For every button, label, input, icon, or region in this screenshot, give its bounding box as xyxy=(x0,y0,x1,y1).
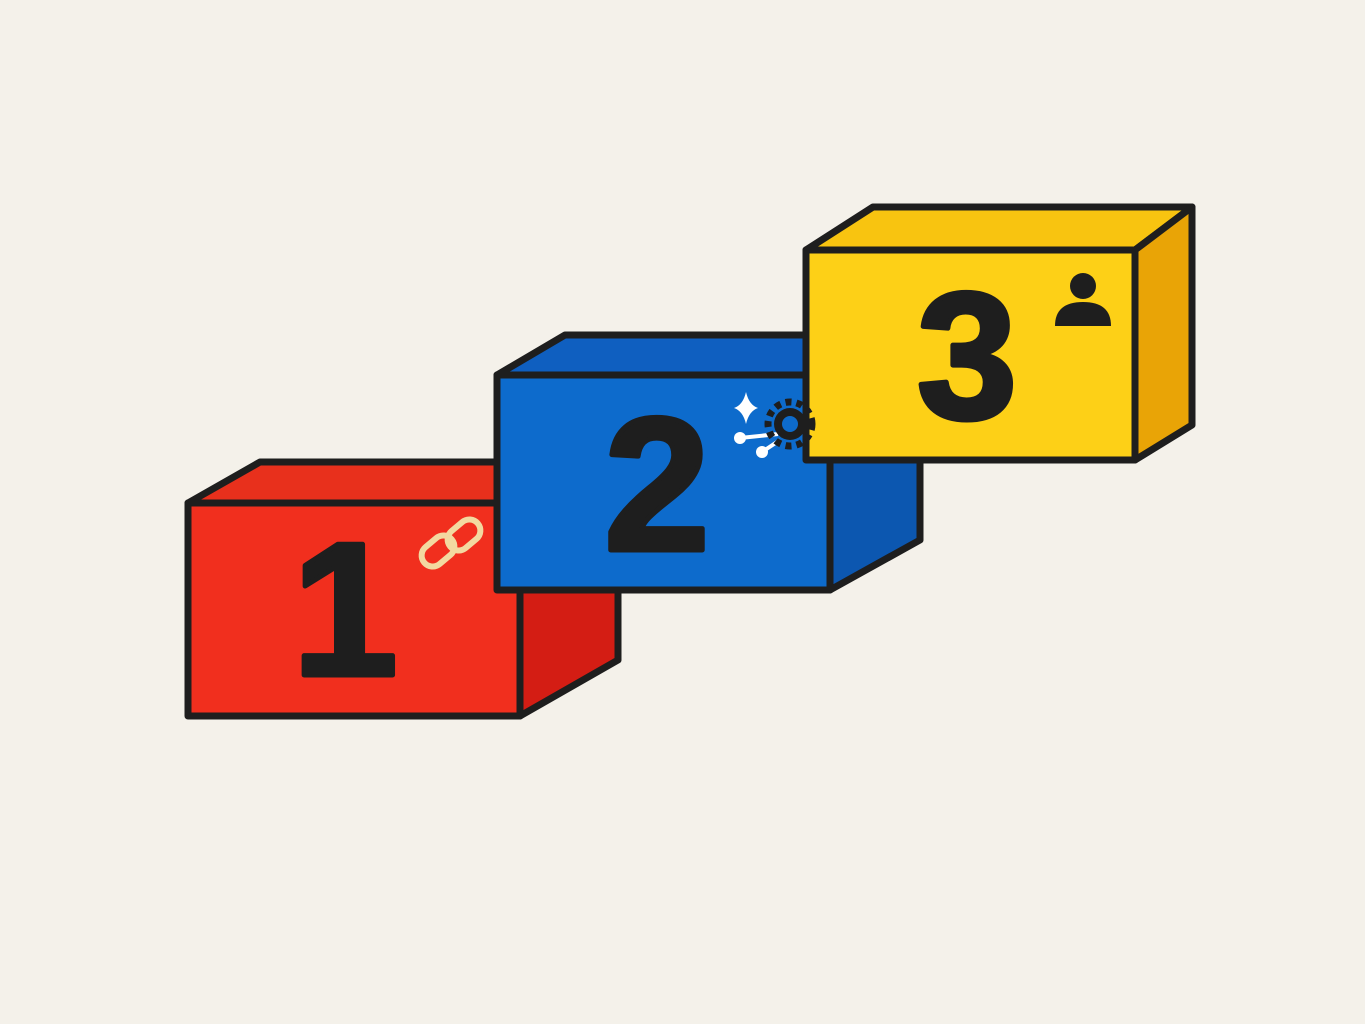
icon: chain link xyxy=(417,515,485,571)
number 2: 2 xyxy=(604,379,710,591)
box 3 yellow xyxy=(806,207,1192,460)
icon: sparkle network gear xyxy=(734,392,812,458)
box 2 blue xyxy=(497,330,920,591)
number 1: 1 xyxy=(292,504,398,716)
box 1 red xyxy=(188,450,618,716)
icon: person xyxy=(1055,273,1111,326)
number 3: 3 xyxy=(917,256,1017,457)
